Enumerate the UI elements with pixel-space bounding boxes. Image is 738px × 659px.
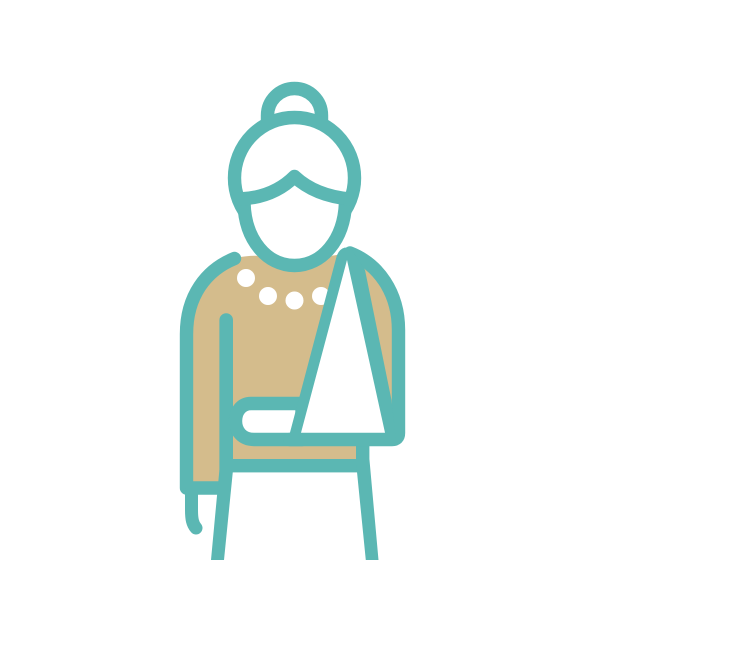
icon: hand [192, 490, 196, 528]
icon: necklace pearls [237, 269, 330, 310]
icon: face outline [244, 203, 346, 266]
icon: triangular sling [288, 248, 396, 440]
icon: right sleeve outline [290, 253, 398, 440]
icon: forearm in sling [236, 404, 302, 440]
icon: left sleeve outline [186, 258, 234, 488]
icon: hair bun [268, 88, 322, 122]
icon: head and hair outline [234, 118, 354, 238]
icon: inner arm line [219, 320, 233, 470]
icon: sling straps [288, 248, 396, 440]
icon: sling white panel [301, 260, 385, 433]
icon: sweater body fill [186, 253, 398, 488]
icon: legs and waist [211, 440, 378, 560]
icon: hair fringe [240, 176, 350, 199]
